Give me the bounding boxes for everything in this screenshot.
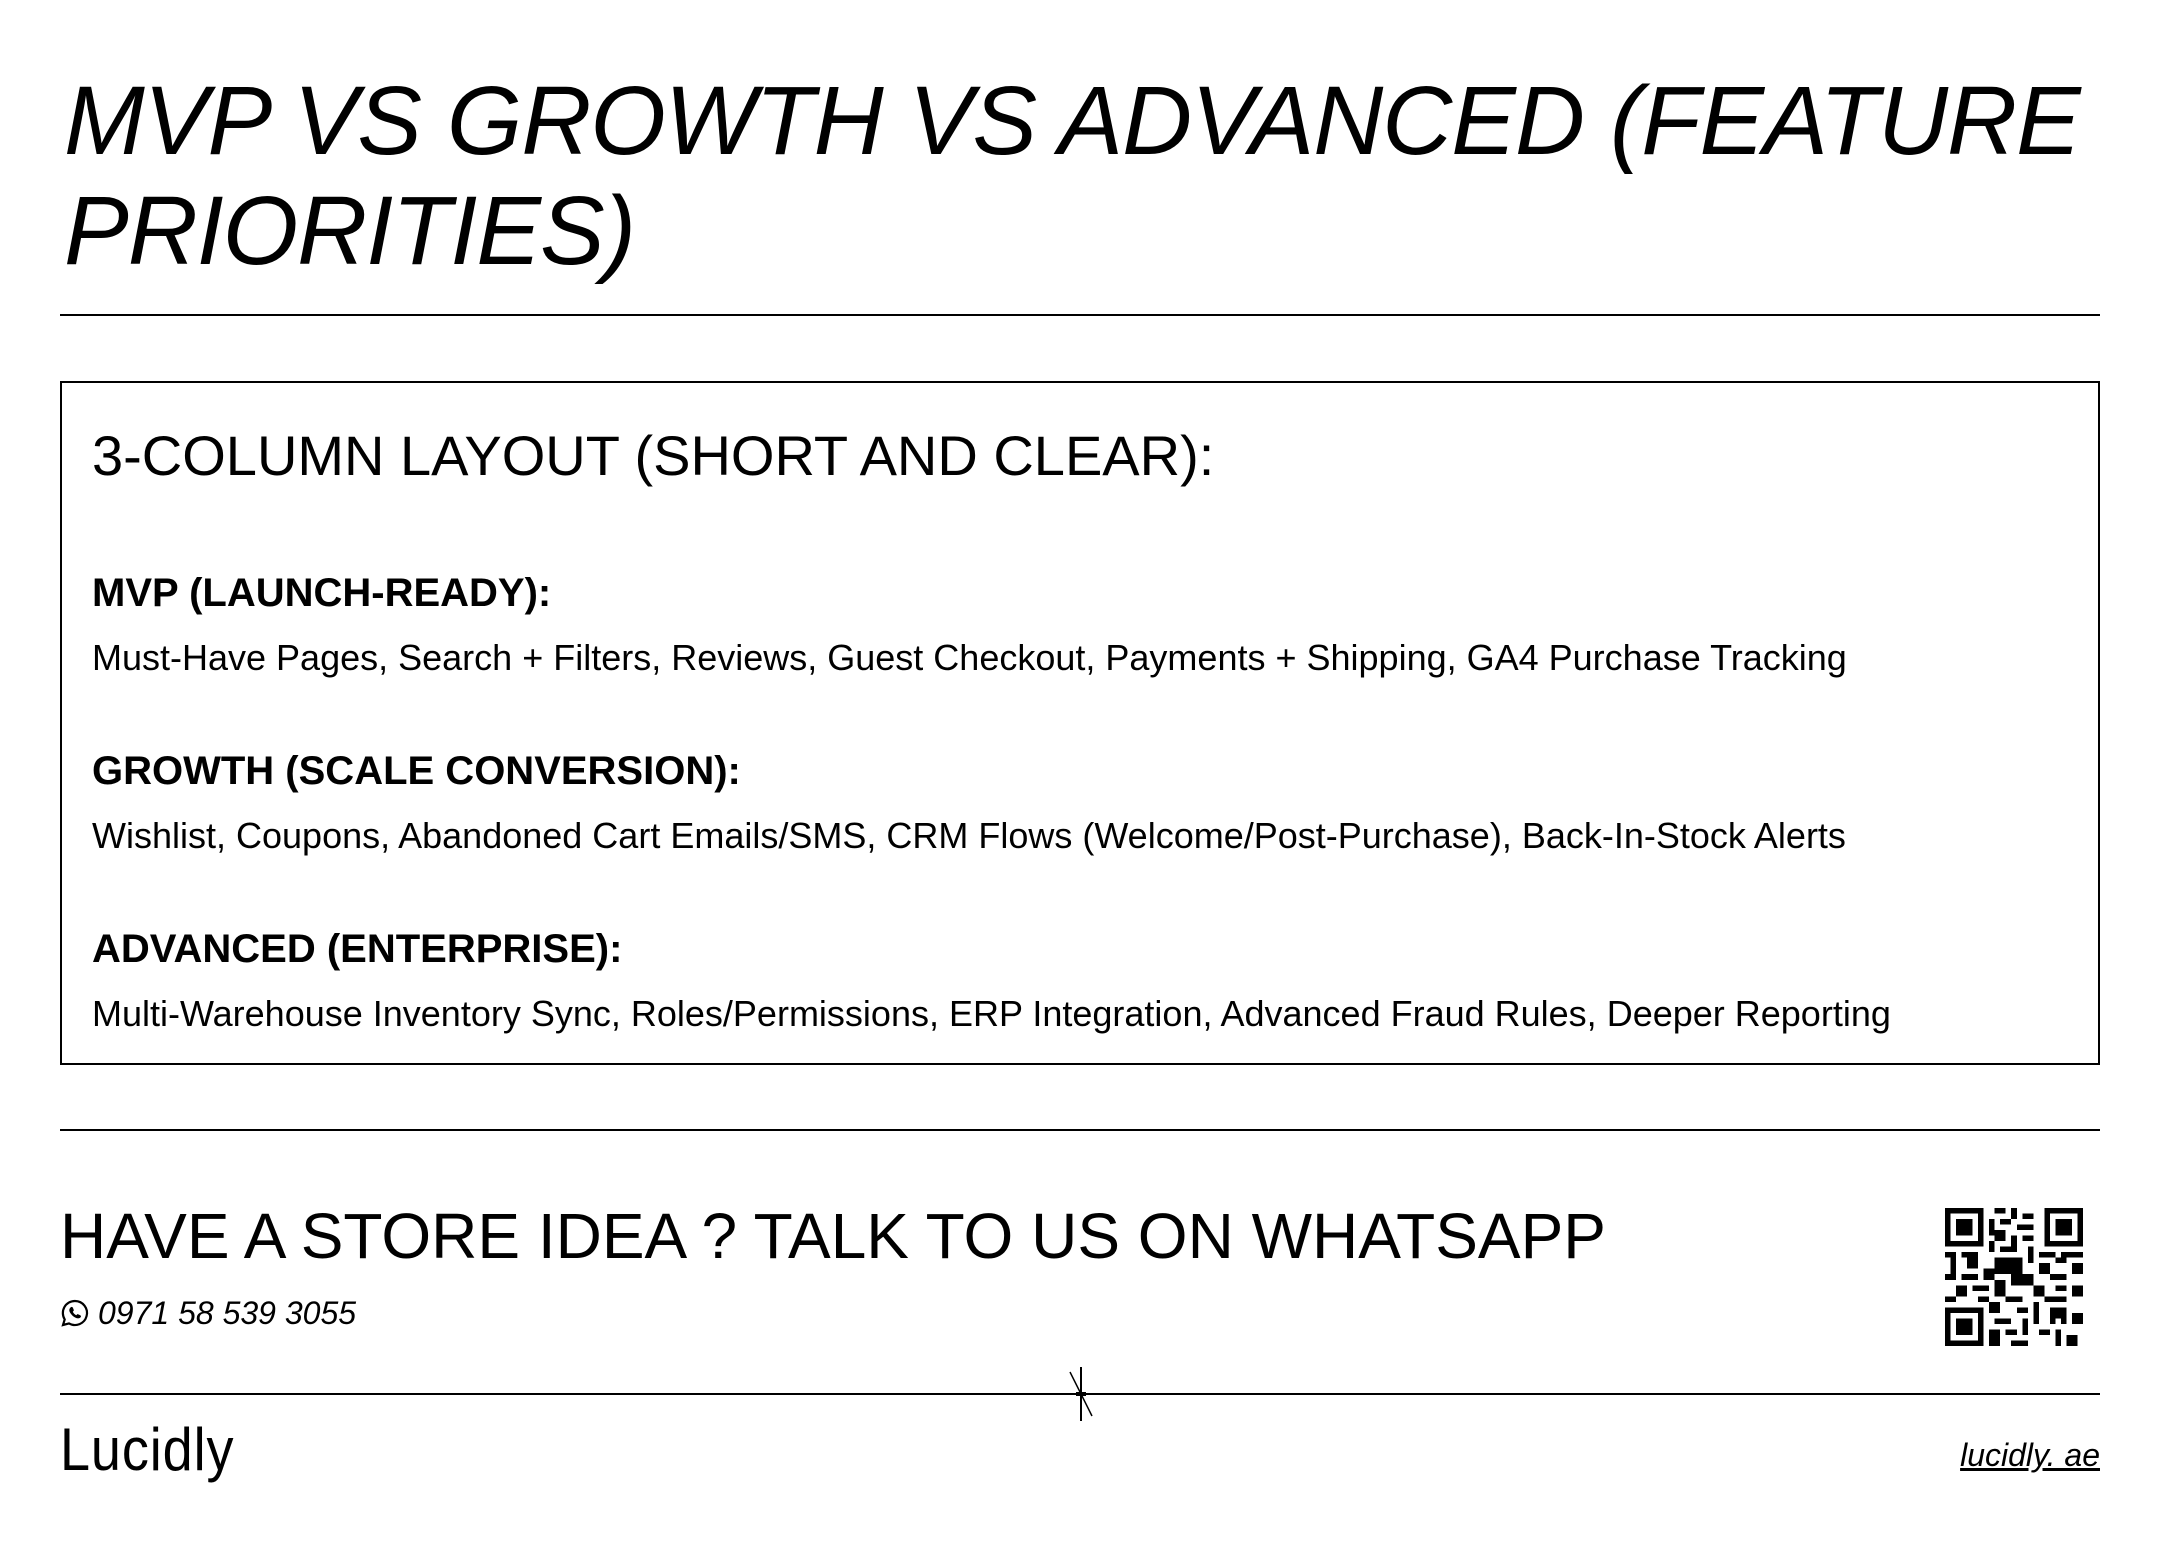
section: Growth bbox=[92, 749, 1846, 856]
QR code bbox=[1945, 1208, 2083, 1346]
icon: whatsapp bbox=[61, 1300, 88, 1327]
logo: Lucidly bbox=[60, 1416, 234, 1483]
section: MVP: MVP (LAUNCH-READY): bbox=[92, 571, 551, 615]
section: MVP: Must-Have Pages, Search + Filters, Reviews, Guest Checkout, Payments + Shipping, GA4 Purchase Tracking bbox=[92, 637, 1847, 678]
CTA heading: HAVE A STORE IDEA ? TALK TO US ON WHATSAPP bbox=[60, 1200, 1606, 1272]
icon: sparkle cross bbox=[1069, 1367, 1093, 1421]
panel heading: 3-COLUMN LAYOUT (SHORT AND CLEAR): bbox=[92, 424, 1214, 487]
section: Advanced: Multi-Warehouse Inventory Sync, Roles/Permissions, ERP Integration, Advanced Fraud Rules, Deeper Reporting bbox=[92, 993, 1891, 1034]
section: Growth: Wishlist, Coupons, Abandoned Cart Emails/SMS, CRM Flows (Welcome/Post-Purchase), Back-In-Stock Alerts bbox=[92, 815, 1846, 856]
website link: lucidly. ae bbox=[1960, 1437, 2100, 1473]
phone contact: 0971 58 539 3055 bbox=[98, 1295, 356, 1331]
title: MVP VS GROWTH VS ADVANCED (FEATURE bbox=[64, 66, 2080, 175]
section: Advanced bbox=[92, 927, 1891, 1034]
title: PRIORITIES) bbox=[64, 176, 635, 285]
section: MVP bbox=[92, 571, 1847, 678]
title bbox=[64, 66, 2082, 285]
section: Advanced: ADVANCED (ENTERPRISE): bbox=[92, 927, 622, 971]
panel: feature priorities bbox=[60, 381, 2100, 1065]
section: Growth: GROWTH (SCALE CONVERSION): bbox=[92, 749, 741, 793]
